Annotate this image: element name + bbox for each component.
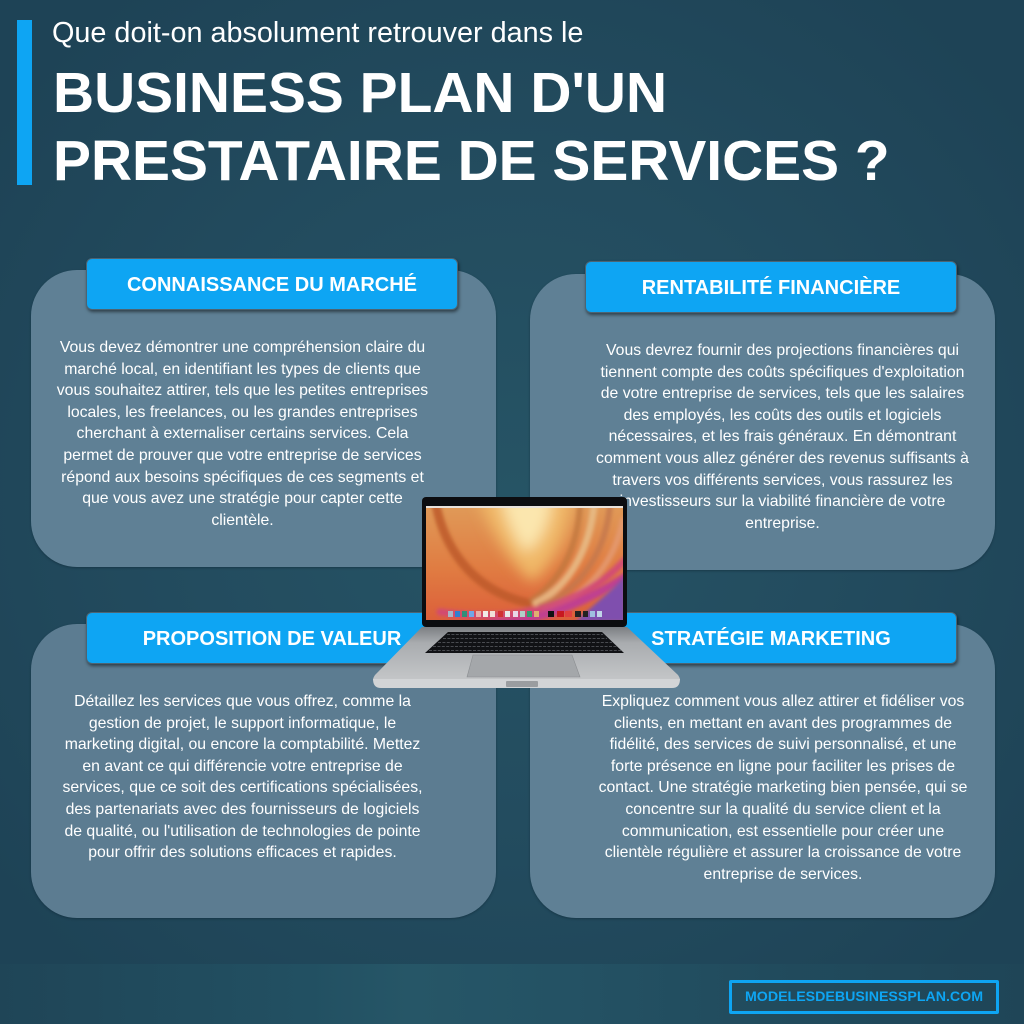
text: connaissance du marché: que vous avez une stratégie pour capter cette bbox=[82, 490, 403, 507]
text: stratégie marketing: clients, en mettant en avant des programmes de bbox=[614, 715, 952, 732]
text: rentabilité financière bbox=[596, 342, 969, 532]
footer background band bbox=[0, 964, 1024, 1024]
text: stratégie marketing: concentre sur la qualité du service client et la bbox=[625, 801, 941, 818]
text: proposition de valeur bbox=[62, 693, 422, 861]
text: connaissance du marché: cherchant à externaliser certains services. Cela bbox=[77, 425, 408, 442]
text: stratégie marketing: clientèle régulière et assurer la croissance de votre bbox=[605, 844, 961, 861]
heading: proposition de valeur: PROPOSITION DE VALEUR bbox=[143, 628, 401, 650]
text: proposition de valeur: Détaillez les services que vous offrez, comme la bbox=[74, 693, 411, 710]
text: rentabilité financière: des employés, les coûts des outils et logiciels bbox=[624, 407, 941, 424]
heading: rentabilité financière bbox=[585, 261, 957, 313]
callout: website bbox=[729, 980, 999, 1014]
text: stratégie marketing: entreprise de services. bbox=[704, 866, 862, 883]
heading: stratégie marketing: STRATÉGIE MARKETING bbox=[651, 628, 891, 650]
text: rentabilité financière: tiennent compte des coûts spécifiques d'exploitation bbox=[601, 364, 964, 381]
text: stratégie marketing: Expliquez comment vous allez attirer et fidéliser vos bbox=[602, 693, 964, 710]
text: connaissance du marché: vous souhaitez attirer, tels que les petites entreprises bbox=[57, 382, 428, 399]
text: connaissance du marché: marché local, en identifiant les types de clients que bbox=[64, 361, 421, 378]
icon: laptop bbox=[373, 497, 680, 688]
heading: stratégie marketing bbox=[585, 612, 957, 664]
keyboard bbox=[425, 632, 624, 653]
panel: proposition de valeur bbox=[31, 624, 496, 918]
text: proposition de valeur: des partenariats avec des fournisseurs de logiciels bbox=[66, 801, 419, 818]
text: proposition de valeur: de qualité, ou l'utilisation de technologies de pointe bbox=[64, 823, 421, 840]
heading: connaissance du marché bbox=[86, 258, 458, 310]
heading: connaissance du marché: CONNAISSANCE DU MARCHÉ bbox=[127, 274, 417, 296]
text: rentabilité financière: Vous devrez fournir des projections financières qui bbox=[606, 342, 959, 359]
heading: rentabilité financière: RENTABILITÉ FINANCIÈRE bbox=[642, 277, 900, 299]
text: connaissance du marché bbox=[56, 339, 428, 529]
text: rentabilité financière: entreprise. bbox=[745, 515, 820, 532]
text: rentabilité financière: investisseurs sur la viabilité financière de votre bbox=[620, 493, 945, 510]
text: rentabilité financière: travers vos différents services, vous rassurez les bbox=[612, 472, 953, 489]
text: proposition de valeur: en avant ce qui différencie votre entreprise de bbox=[82, 758, 403, 775]
text: stratégie marketing: fidélité, des services de suivi personnalisé, et une bbox=[610, 736, 956, 753]
base bbox=[373, 627, 680, 680]
text: connaissance du marché: permet de prouver que votre entreprise de services bbox=[63, 447, 422, 464]
text: stratégie marketing: communication, est essentielle pour créer une bbox=[622, 823, 944, 840]
callout: website: MODELESDEBUSINESSPLAN.COM bbox=[745, 989, 983, 1005]
heading: proposition de valeur bbox=[86, 612, 458, 664]
text: proposition de valeur: gestion de projet, le support informatique, le bbox=[89, 715, 396, 732]
panel: stratégie marketing bbox=[530, 624, 995, 918]
screen wallpaper bbox=[426, 506, 623, 620]
text: rentabilité financière: de votre entreprise de services, tels que les salaires bbox=[601, 385, 964, 402]
accent bar bbox=[17, 20, 32, 185]
lid bbox=[422, 497, 627, 627]
title: PRESTATAIRE DE SERVICES ? bbox=[53, 129, 890, 193]
text: connaissance du marché: Vous devez démontrer une compréhension claire du bbox=[60, 339, 425, 356]
text: rentabilité financière: nécessaires, et les frais généraux. En démontrant bbox=[609, 428, 956, 445]
subtitle: Que doit-on absolument retrouver dans le bbox=[52, 17, 583, 49]
panel: connaissance du marché bbox=[31, 270, 496, 567]
text: proposition de valeur: services, que ce soit des certifications spécialisées, bbox=[62, 779, 422, 796]
text: stratégie marketing bbox=[599, 693, 967, 883]
title bbox=[53, 61, 890, 193]
text: proposition de valeur: pour offrir des solutions efficaces et rapides. bbox=[88, 844, 397, 861]
text: connaissance du marché: répond aux besoins spécifiques de ces segments et bbox=[61, 469, 424, 486]
text: connaissance du marché: locales, les freelances, ou les grandes entreprises bbox=[67, 404, 418, 421]
text: proposition de valeur: marketing digital, ou encore la comptabilité. Mettez bbox=[65, 736, 420, 753]
dock bbox=[448, 611, 602, 617]
trackpad bbox=[467, 655, 580, 677]
panel: rentabilité financière bbox=[530, 274, 995, 570]
text: rentabilité financière: comment vous allez générer des revenus suffisants à bbox=[596, 450, 969, 467]
title: BUSINESS PLAN D'UN bbox=[53, 61, 667, 125]
text: stratégie marketing: contact. Une stratégie marketing bien pensée, qui se bbox=[599, 779, 967, 796]
text: stratégie marketing: forte présence en ligne pour faciliter les prises de bbox=[611, 758, 955, 775]
text: connaissance du marché: clientèle. bbox=[211, 512, 274, 529]
